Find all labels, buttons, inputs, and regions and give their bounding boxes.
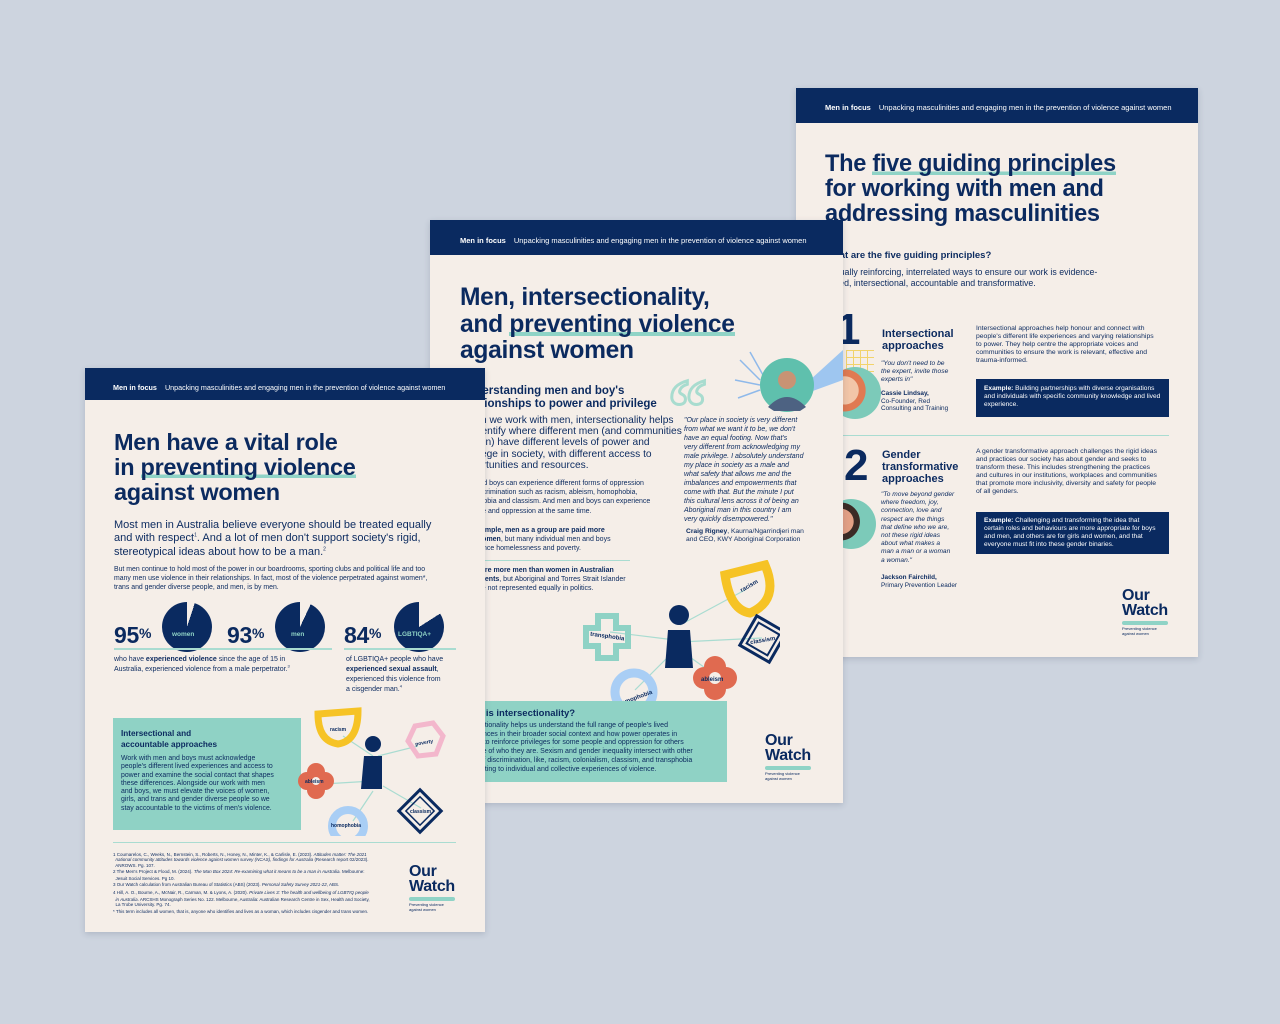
quote xyxy=(881,360,948,383)
stat: 95% women: women xyxy=(172,631,194,638)
page: men have a vital role (front) xyxy=(85,368,485,932)
title xyxy=(460,284,735,364)
logo: Preventing violence xyxy=(765,771,800,776)
logo: Preventing violence xyxy=(409,902,444,907)
title: Men, intersectionality, xyxy=(460,284,710,311)
quote: man a man or a woman xyxy=(881,548,950,555)
quote xyxy=(881,491,954,564)
quote text: imbalances and empowerments that xyxy=(684,480,796,487)
quote: "You don't need to be xyxy=(881,360,945,367)
quote text: my place in society as a male and xyxy=(684,462,789,469)
quote: a woman." xyxy=(881,557,912,564)
diagram: oppressions: classism xyxy=(410,809,432,815)
title: addressing masculinities xyxy=(825,201,1100,227)
logo: against women xyxy=(1122,631,1149,636)
footnotes xyxy=(113,852,370,914)
diagram: oppressions: racism xyxy=(330,727,347,733)
logo: Our xyxy=(765,732,793,749)
logo: against women xyxy=(409,907,436,912)
teal box: intersectional and accountable approaches: and boys, we must elevate the voices of women, xyxy=(121,788,269,795)
small text: privilege and oppression at the same time. xyxy=(460,508,592,515)
page: intersectionality (middle): There are more men than women in Australian xyxy=(460,567,614,574)
stat captions: who have experienced violence since the age of 15 in xyxy=(114,656,285,663)
intro text xyxy=(825,267,1097,288)
teal box: intersectional and accountable approaches xyxy=(113,718,301,830)
heading xyxy=(882,328,954,352)
quote: respect are the things xyxy=(881,516,944,523)
logo: Watch xyxy=(409,878,455,895)
quote text: male privilege. I absolutely understand xyxy=(684,453,803,460)
description: transform these. This includes strengthening the practices xyxy=(976,464,1150,471)
logo: Preventing violence xyxy=(1122,626,1157,631)
description: and practices our society has about gender and seeks to xyxy=(976,456,1146,463)
teal box: what is intersectionality: forms of discrimination, like, racism, colonialism, classism, and transphobia xyxy=(460,757,692,764)
logo xyxy=(1122,587,1168,636)
icon: grid xyxy=(846,350,874,400)
quote: experts in" xyxy=(881,376,912,383)
page: men have a vital role (front): experienced sexual assault, xyxy=(346,666,439,673)
photo with burst xyxy=(734,350,843,412)
principle 2: Primary Prevention Leader xyxy=(881,582,957,589)
diagram: intersectionality: homophobia xyxy=(617,690,654,708)
logo xyxy=(409,863,455,912)
teal box: intersectional and accountable approaches: people's different lived experiences and access to xyxy=(121,763,273,770)
title xyxy=(825,151,1116,227)
principle 1: Consulting and Training xyxy=(881,405,948,412)
description: that promote more inclusivity, diversity and safety for people xyxy=(976,480,1156,487)
quote: connection, love and xyxy=(881,507,942,514)
heading xyxy=(882,449,958,485)
description xyxy=(976,448,1157,495)
teal box: intersectional and accountable approaches: accountable approaches xyxy=(121,740,217,748)
quote text: from what we want it to be, we don't xyxy=(684,426,795,433)
stat captions: Australia, experienced violence from a male perpetrator.3 xyxy=(114,664,290,673)
footnotes: in Australia. ARCSHS Monograph Series No. 122. Melbourne, Australia: Australian Research Centre in Sex, Health and Society, xyxy=(116,897,370,902)
description: trauma-informed. xyxy=(976,357,1028,364)
header bar: Men in focus Unpacking masculinities and engaging men in the prevention of violence against women xyxy=(825,103,1172,112)
footnotes: Jesuit Social Services. Pg 10. xyxy=(116,876,175,881)
header bar: Men in focus Unpacking masculinities and engaging men in the prevention of violence against women xyxy=(113,383,445,392)
stat: 93% men: men xyxy=(291,631,304,638)
page: intersectionality (middle): experience homelessness and poverty. xyxy=(460,545,581,552)
diagram: intersectionality: racism xyxy=(740,579,759,594)
teal box: what is intersectionality: because of who they are. Sexism and gender inequality intersect with other xyxy=(460,748,693,755)
small text: transphobia and classism. And men and boys can experience xyxy=(460,498,650,505)
title: The five guiding principles xyxy=(825,151,1116,177)
page: intersectionality (middle): than women, but many individual men and boys xyxy=(460,536,611,543)
heading: transformative xyxy=(882,461,958,473)
footnotes: 3 Our Watch calculation from Australian Bureau of Statistics (ABS) (2023). Personal Safety Survey 2021-22, ABS. xyxy=(113,882,339,887)
small paragraph: But men continue to hold most of the power in our boardrooms, sporting clubs and political life and too xyxy=(114,566,425,573)
title xyxy=(114,429,356,505)
stat: 95% women xyxy=(114,602,212,652)
quote text: very quickly disempowered." xyxy=(684,516,772,523)
logo: against women xyxy=(765,776,792,781)
logo: Watch xyxy=(1122,602,1168,619)
title: for working with men and xyxy=(825,176,1104,202)
footnotes: national community attitudes towards violence against women survey (NCAS), findings for Australia (Research report 02/2023). xyxy=(116,857,368,862)
page: intersectionality (middle) xyxy=(430,220,843,803)
teal box: intersectional and accountable approaches: Work with men and boys must acknowledge xyxy=(121,755,255,762)
subheading: Understanding men and boy's xyxy=(460,385,624,397)
stat: 95% women: 95% xyxy=(114,622,151,648)
body text: of men) have different levels of power and xyxy=(460,437,650,448)
example box: Example: Building partnerships with diverse organisations and individuals with specific community knowledge and lived experience. xyxy=(984,385,1160,408)
heading: approaches xyxy=(882,340,944,352)
diagram: intersectionality: ableism xyxy=(701,677,723,683)
teal box: what is intersectionality: society to reinforce privileges for some people and oppression for others xyxy=(460,739,684,746)
header bar xyxy=(430,220,843,255)
stat: 84% LGBTIQA+: LGBTIQA+ xyxy=(398,631,431,638)
photo xyxy=(829,367,881,419)
stat: 84% LGBTIQA+: 84% xyxy=(344,622,381,648)
description xyxy=(976,325,1154,364)
stat: 84% LGBTIQA+ xyxy=(344,602,444,652)
diagram: oppressions: poverty xyxy=(415,739,434,748)
quote text: come with that. But the minute I put xyxy=(684,489,794,496)
subheading: What are the five guiding principles? xyxy=(825,250,991,261)
body text xyxy=(460,415,682,471)
number 1: 1 xyxy=(836,305,860,354)
body text: us identify where different men (and communities xyxy=(460,426,682,437)
quote text: "Our place in society is very different xyxy=(684,417,797,424)
small text: Men and boys can experience different forms of oppression xyxy=(460,480,644,487)
page: intersectionality (middle): and CEO, KWY Aboriginal Corporation xyxy=(686,536,800,543)
description: people's different life experiences and varying relationships xyxy=(976,333,1154,340)
teal box: intersectional and accountable approaches: Intersectional and xyxy=(121,729,191,738)
quote: that define who we are, xyxy=(881,524,949,531)
example box xyxy=(976,512,1169,554)
description: and cultures in our institutions, workplaces and communities xyxy=(976,472,1157,479)
page: men have a vital role (front): of LGBTIQA+ people who have xyxy=(346,656,443,663)
teal box: what is intersectionality: Intersectionality helps us understand the full range of people's lived xyxy=(460,722,668,729)
diagram: oppressions: ableism xyxy=(305,779,324,785)
intro text: Mutually reinforcing, interrelated ways to ensure our work is evidence- xyxy=(825,267,1097,277)
description: of all genders. xyxy=(976,488,1019,495)
title: and preventing violence xyxy=(460,310,735,338)
page: men have a vital role (front): a cisgender man.4 xyxy=(346,684,402,693)
description: Intersectional approaches help honour and connect with xyxy=(976,325,1145,332)
teal box: what is intersectionality: What is intersectionality? xyxy=(460,708,575,719)
page: intersectionality (middle): For example, men as a group are paid more xyxy=(460,527,605,534)
stat: 93% men xyxy=(227,602,325,652)
footnotes: 1 Coumarelos, C., Weeks, N., Bernstein, S., Roberts, N., Honey, N., Minter, K., & Carlisle, E. (2023). Attitudes matter: The 2021 xyxy=(113,852,367,857)
principle 1: Cassie Lindsay, xyxy=(881,390,929,397)
footnotes: 4 Hill, A. O., Bourne, A., McNair, R., Carman, M. & Lyons, A. (2020). Private Lives 3: The health and wellbeing of LGBTIQ people xyxy=(113,890,369,895)
logo xyxy=(765,732,811,781)
logo: Watch xyxy=(765,747,811,764)
small paragraph: trans and gender diverse people, and men, is by men. xyxy=(114,584,279,591)
principle 1 xyxy=(836,305,1169,419)
example box: Example: Challenging and transforming the idea that certain roles and behaviours are more appropriate for boys and men, and others are for girls and women, and that everyone must fit into these gender binaries. xyxy=(984,517,1156,548)
subheading xyxy=(460,385,657,410)
header bar xyxy=(85,368,485,400)
intro text: based, intersectional, accountable and transformative. xyxy=(825,278,1036,288)
stat: 93% men: 93% xyxy=(227,622,264,648)
teal box: intersectional and accountable approaches: girls, and trans and gender diverse people so we xyxy=(121,796,270,803)
photo xyxy=(826,499,876,549)
teal box: what is intersectionality: contributing to individual and collective experiences of violence. xyxy=(460,766,657,773)
body text: privilege in society, with different access to xyxy=(460,449,652,460)
intro paragraph: and with respect1. And a lot of men don't support society's rigid, xyxy=(114,532,421,544)
principle 2 xyxy=(843,441,1169,589)
principle 2: Jackson Fairchild, xyxy=(881,574,937,581)
title: against women xyxy=(114,479,280,505)
heading: Gender xyxy=(882,449,921,461)
subheading: relationships to power and privilege xyxy=(460,398,657,410)
diagram: intersectionality: transphobia xyxy=(590,632,625,642)
page: intersectionality (middle): parliaments, but Aboriginal and Torres Strait Islander xyxy=(460,576,626,583)
quote text: what safety that allows me and the xyxy=(684,471,791,478)
page: intersectionality (middle): men are not represented equally in politics. xyxy=(460,585,593,592)
quote: not these rigid ideas xyxy=(881,532,940,539)
number 2: 2 xyxy=(844,441,868,490)
quote text: very different from acknowledging my xyxy=(684,444,800,451)
teal box: intersectional and accountable approaches: power and examine the social contact that shapes xyxy=(121,772,274,779)
stat captions xyxy=(114,656,290,673)
header bar xyxy=(796,88,1198,123)
footnotes: * This term includes all women, that is, anyone who identifies and lives as a woman, which includes cisgender and trans women. xyxy=(113,909,368,914)
heading: approaches xyxy=(882,473,944,485)
heading: Intersectional xyxy=(882,328,954,340)
teal box: what is intersectionality: experiences in their broader social context and how power operates in xyxy=(460,731,677,738)
body text: opportunities and resources. xyxy=(460,460,589,471)
header bar: Men in focus Unpacking masculinities and engaging men in the prevention of violence against women xyxy=(460,236,807,245)
intro paragraph: Most men in Australia believe everyone should be treated equally xyxy=(114,519,431,531)
diagram: intersectionality xyxy=(583,560,780,708)
principle 1: Co-Founder, Red xyxy=(881,398,930,405)
body text: When we work with men, intersectionality helps xyxy=(460,415,673,426)
teal box: intersectional and accountable approaches: stay accountable to the victims of men's violence. xyxy=(121,805,272,812)
footnotes: ANROWS. Pg. 107. xyxy=(115,863,155,868)
teal box: intersectional and accountable approaches: these differences. Alongside our work with men xyxy=(121,780,265,787)
diagram: oppressions xyxy=(298,707,446,836)
page: five guiding principles (back) xyxy=(796,88,1198,657)
logo: Our xyxy=(1122,587,1150,604)
quote text: Aboriginal man in this country I am xyxy=(684,507,791,514)
quote: about what makes a xyxy=(881,540,940,547)
footnotes: 2 The Men's Project & Flood, M. (2024). The Man Box 2024: Re-examining what it means to be a man in Australia. Melbourne: xyxy=(113,869,364,874)
small paragraph xyxy=(114,566,427,591)
page: men have a vital role (front): experienced this violence from xyxy=(346,676,441,683)
title: against women xyxy=(460,337,634,364)
quote text: this cultural lens across it of being an xyxy=(684,498,799,505)
quote: "To move beyond gender xyxy=(881,491,954,498)
example box xyxy=(976,379,1169,417)
page: intersectionality (middle): Craig Rigney, Kaurna/Ngarrindjeri man xyxy=(686,528,804,535)
description: A gender transformative approach challenges the rigid ideas xyxy=(976,448,1157,455)
description: to power. They help centre the appropriate voices and xyxy=(976,341,1138,348)
small text xyxy=(460,480,650,515)
small paragraph: many men use violence in their relationships. In fact, most of the violence perpetrated against women*, xyxy=(114,575,427,582)
quote text: have an equal footing. Now that's xyxy=(684,435,787,442)
small text: and discrimination such as racism, ableism, homophobia, xyxy=(460,489,637,496)
title: in preventing violence xyxy=(114,454,356,480)
diagram: intersectionality: classism xyxy=(750,636,776,646)
intro paragraph xyxy=(114,519,432,558)
logo: Our xyxy=(409,863,437,880)
quote: where freedom, joy, xyxy=(881,499,938,506)
title: Men have a vital role xyxy=(114,429,338,455)
diagram: oppressions: homophobia xyxy=(331,823,361,829)
intro paragraph: stereotypical ideas about how to be a man.2 xyxy=(114,546,326,558)
footnotes: La Trobe University. Pg. 74. xyxy=(116,902,171,907)
quote: the expert, invite those xyxy=(881,368,948,375)
description: communities to ensure the work is relevant, effective and xyxy=(976,349,1147,356)
quote text xyxy=(684,416,804,523)
teal box: what is intersectionality xyxy=(430,701,727,782)
